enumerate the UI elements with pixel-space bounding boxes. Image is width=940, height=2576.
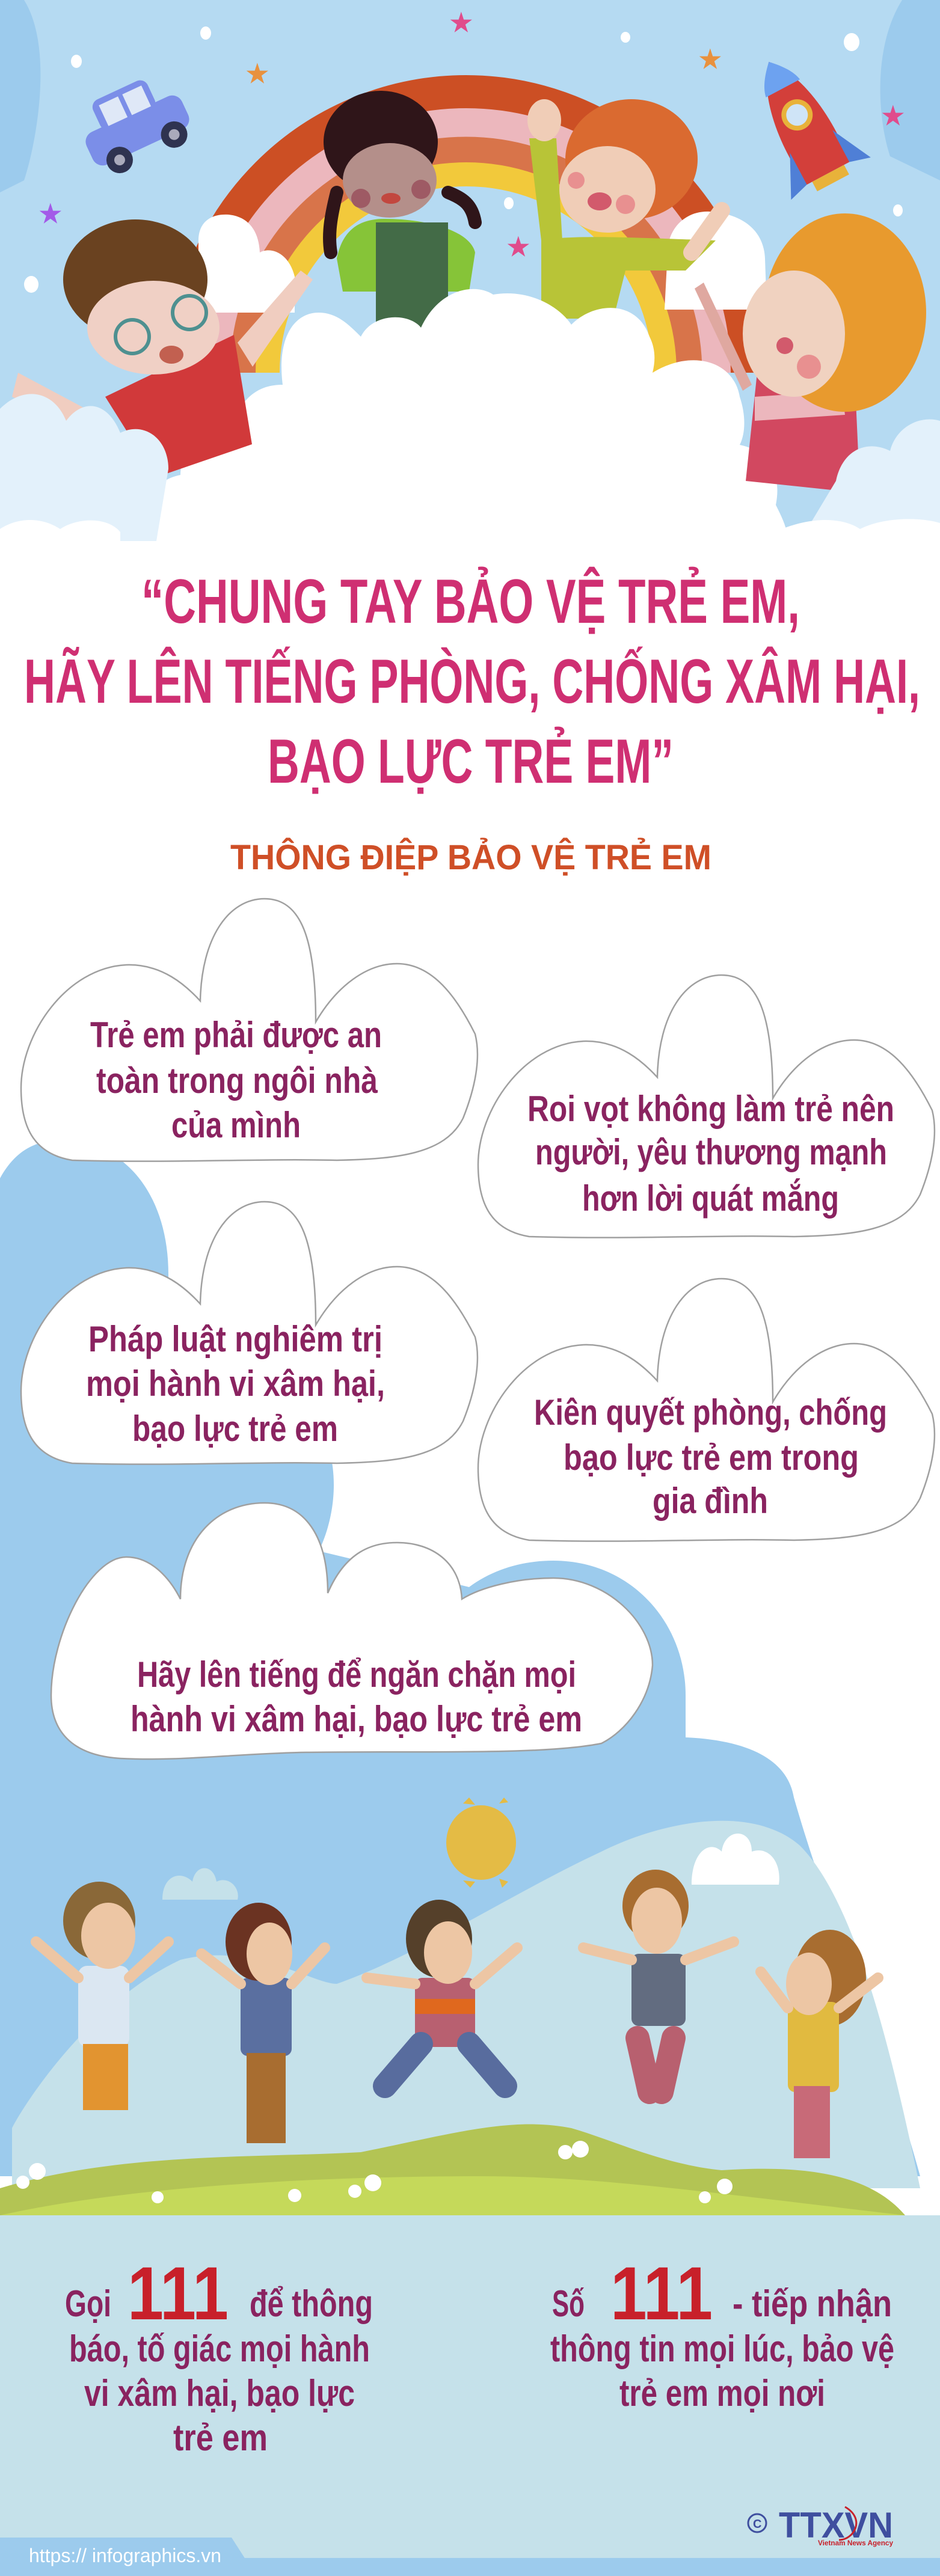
- cloud 1: toàn trong ngôi nhà: [96, 1060, 378, 1101]
- hotline text left: vi xâm hại, bạo lực: [84, 2373, 355, 2414]
- hotline text left: báo, tố giác mọi hành: [69, 2328, 370, 2370]
- cloud 2: [478, 975, 935, 1238]
- stars: ★: [699, 45, 722, 73]
- hotline text right: [550, 2252, 894, 2414]
- kid: blonde girl: [695, 213, 926, 493]
- hotline text left: Gọi: [65, 2283, 111, 2325]
- cloud 3: mọi hành vi xâm hại,: [86, 1363, 385, 1404]
- kid 3: [367, 1900, 517, 2086]
- hotline text right: Số: [552, 2283, 585, 2325]
- kid 1: [36, 1882, 168, 2110]
- header illustration: [0, 0, 940, 541]
- footer: [0, 2538, 940, 2576]
- hotline text left: để thông: [250, 2283, 373, 2325]
- cloud 4: gia đình: [653, 1481, 768, 1521]
- kid: boy with glasses: [12, 219, 313, 477]
- icon: rocket: [729, 41, 873, 204]
- clouds: header bottom: [0, 394, 940, 541]
- cloud 3: Pháp luật nghiêm trị: [88, 1319, 382, 1359]
- logo: TTXVN: C: [753, 2518, 761, 2531]
- stars: ★: [507, 233, 530, 261]
- cloud 5: hành vi xâm hại, bạo lực trẻ em: [131, 1699, 582, 1739]
- bottom scene: hill, sun, grass, kids: [0, 1797, 920, 2215]
- kid 2: [201, 1903, 325, 2143]
- title: BẠO LỰC TRẺ EM”: [268, 726, 674, 797]
- cloud 3: [21, 1202, 478, 1464]
- subtitle: THÔNG ĐIỆP BẢO VỆ TRẺ EM: [230, 838, 711, 877]
- hotline text left: trẻ em: [173, 2417, 268, 2459]
- stars: [39, 8, 926, 509]
- title: [24, 566, 920, 797]
- stars: ★: [450, 8, 473, 37]
- cloud 2: hơn lời quát mắng: [582, 1178, 839, 1219]
- kid 4: [583, 1870, 734, 2092]
- cloud 5: [51, 1503, 653, 1759]
- cloud 5: Hãy lên tiếng để ngăn chặn mọi: [137, 1654, 576, 1695]
- hotline text left: 111: [127, 2252, 229, 2336]
- stars: ★: [57, 464, 80, 492]
- stars: ★: [246, 60, 269, 88]
- hotline text right: - tiếp nhận: [733, 2283, 892, 2325]
- cloud 4: bạo lực trẻ em trong: [564, 1437, 859, 1478]
- grass: [0, 2125, 905, 2215]
- icon: sun: [446, 1797, 516, 1888]
- cloud 1: [21, 899, 478, 1161]
- cloud 4: [478, 1279, 935, 1541]
- small clouds behind rainbow: [198, 212, 767, 313]
- big blue background shape: [0, 1140, 920, 2176]
- footer: https:// infographics.vn: [29, 2545, 221, 2566]
- hotline text right: trẻ em mọi nơi: [619, 2373, 825, 2414]
- stars: ★: [39, 200, 62, 228]
- cloud 1: Trẻ em phải được an: [90, 1015, 382, 1055]
- hotline text right: 111: [610, 2252, 713, 2336]
- stars: ★: [882, 102, 905, 130]
- cloud 1: của mình: [171, 1105, 301, 1145]
- bottom panel background: [0, 2215, 940, 2576]
- rainbow: [186, 93, 746, 373]
- logo: TTXVN: Vietnam News Agency: [818, 2539, 893, 2547]
- cloud 3: bạo lực trẻ em: [132, 1409, 338, 1449]
- kid: red-haired boy: [527, 99, 722, 319]
- icon: toy car: [70, 67, 199, 182]
- kid 5: [761, 1930, 878, 2158]
- kid: girl with braids: [324, 91, 475, 331]
- big header cloud: [149, 289, 788, 541]
- stars: ★: [903, 480, 926, 509]
- hotline text left: [65, 2252, 373, 2459]
- logo: TTXVN: TTXVN: [779, 2505, 893, 2545]
